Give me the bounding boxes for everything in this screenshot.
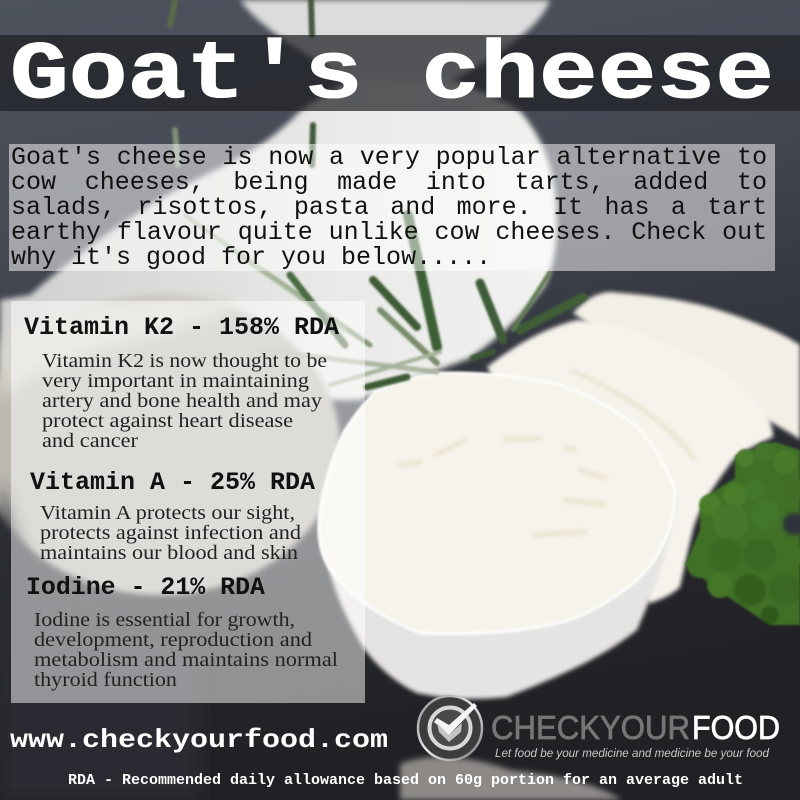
cheese slices (319, 292, 800, 699)
heading: Vitamin K2: Vitamin K2 - 158% RDA (24, 313, 339, 342)
text: Vitamin K2: very important in maintaining (42, 371, 309, 392)
text: Vitamin K2 (42, 351, 327, 452)
nutrients panel (11, 301, 365, 703)
left cheese slice behind panel (0, 295, 340, 800)
website url: www.checkyourfood.com (10, 725, 388, 755)
second slice (487, 320, 773, 603)
title band (0, 29, 800, 122)
text: Vitamin A: maintains our blood and skin (40, 543, 298, 564)
bottom mirrored blob (400, 757, 622, 800)
logo: Check Your Food (418, 696, 780, 760)
text: Vitamin A: protects against infection and (40, 523, 301, 544)
icon: check mark badge (418, 696, 482, 760)
title: Goat's cheese (10, 29, 774, 122)
intro text panel: Goat's cheese is now a very popular alternative to (11, 143, 767, 172)
text: Iodine: thyroid function (34, 670, 177, 691)
intro text panel: salads, risottos, pasta and more. It has a tart (11, 193, 767, 222)
text: Iodine: development, reproduction and (34, 630, 312, 651)
rosemary sprig (170, 0, 583, 387)
intro text panel: why it's good for you below..... (11, 243, 491, 272)
intro text panel: earthy flavour quite unlike cow cheeses. Check out (11, 218, 767, 247)
logo: Check Your Food: FOOD (692, 709, 780, 746)
logo: Check Your Food: Let food be your medicine and medicine be your food (495, 748, 770, 760)
text: Vitamin K2: Vitamin K2 is now thought to be (42, 351, 327, 372)
parsley leaf (685, 442, 800, 625)
text: Iodine: Iodine is essential for growth, (34, 610, 295, 631)
text: Vitamin A: Vitamin A protects our sight, (40, 503, 295, 524)
heading: Vitamin A: Vitamin A - 25% RDA (30, 468, 315, 497)
text: Iodine (34, 610, 339, 691)
text: Vitamin K2: and cancer (42, 431, 139, 452)
heading: Iodine: Iodine - 21% RDA (26, 573, 265, 602)
logo: Check Your Food: CHECKYOUR (491, 709, 690, 746)
text: Iodine: metabolism and maintains normal (34, 650, 339, 671)
main slice wall (320, 400, 677, 699)
mirrored cheese log at top (0, 0, 557, 400)
footnote: RDA - Recommended daily allowance based on 60g portion for an average adult (68, 772, 743, 789)
text: Vitamin K2: artery and bone health and may (42, 391, 322, 412)
main slice face (319, 373, 675, 634)
text: Vitamin K2: protect against heart disease (42, 411, 293, 432)
text: Vitamin A (40, 503, 301, 564)
intro text panel: cow cheeses, being made into tarts, added to (11, 168, 767, 197)
third slice (573, 292, 800, 440)
intro text panel (9, 143, 775, 272)
